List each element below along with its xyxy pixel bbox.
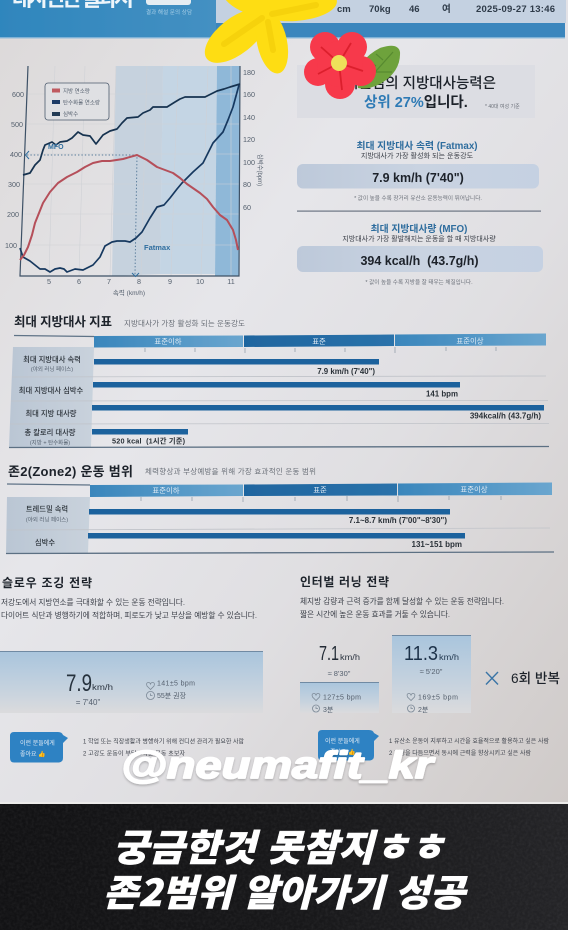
icon: clock: [408, 705, 415, 712]
easy interval: [300, 643, 379, 714]
Fatmax label: Fatmax: [144, 243, 171, 252]
row: treadmill speed: [26, 504, 450, 525]
row: total calories: [24, 428, 188, 446]
easy interval: 7.1: [319, 643, 339, 665]
section subtitle: 지방대사가 가장 활성화 되는 운동강도: [124, 318, 245, 328]
scale header: 표준이하: [152, 486, 180, 495]
easy interval: 127±5 bpm: [323, 694, 361, 702]
heart rate axis ticks: 80: [243, 180, 251, 189]
recommendation list: 1 학업 또는 직장생활과 병행하기 위해 컨디션 관리가 필요한 사람: [83, 738, 244, 746]
hard interval: 169±5 bpm: [418, 694, 458, 702]
row: total calories: 총 칼로리 대사량: [24, 428, 76, 437]
profile row: cm: [337, 4, 351, 15]
row: max fat metabolism: 최대 지방 대사량: [25, 409, 77, 418]
left axis ticks: 100: [5, 241, 17, 250]
strategy description: 저강도에서 지방연소를 극대화할 수 있는 운동 전략입니다.: [1, 597, 185, 607]
slow jogging target panel: km/h: [92, 683, 113, 692]
heart rate axis ticks: 140: [243, 113, 255, 122]
left axis ticks: 600: [12, 90, 24, 99]
section title: 최대 지방대사 지표: [14, 315, 112, 329]
speed axis ticks: 5: [47, 277, 51, 286]
slow jogging target panel: = 7'40": [76, 698, 100, 707]
summary line 2: 상위 27%입니다.: [364, 94, 468, 111]
row: heart rate: 131~151 bpm: [412, 540, 462, 549]
scale header: 표준이상: [460, 485, 488, 494]
left axis ticks: 400: [10, 150, 22, 159]
speed axis ticks: 6: [77, 277, 81, 286]
easy interval: 3분: [323, 706, 334, 714]
panel: MFO: [297, 222, 543, 286]
row: max fat speed: 최대 지방대사 속력: [23, 355, 81, 364]
left axis ticks: [5, 90, 24, 250]
strategy title: 슬로우 조깅 전략: [2, 576, 92, 590]
Fatmax value: 7.9 km/h (7'40"): [372, 171, 464, 185]
chart: fat and carbohydrate burn curves: [5, 66, 264, 297]
row: max fat metabolism: [25, 405, 544, 420]
strategy description: 체지방 감량과 근력 증가를 함께 달성할 수 있는 운동 전략입니다.: [300, 596, 504, 606]
report header: [0, 0, 566, 38]
panel: Fatmax: 최대 지방대사 속력 (Fatmax): [356, 139, 478, 152]
easy interval: ≈ 8'30": [328, 669, 351, 678]
profile row: 여: [442, 3, 451, 15]
sticker: red flower: [304, 32, 376, 99]
row labels column: [6, 497, 90, 553]
strategy description: 짧은 시간에 높은 운동 효과를 거둘 수 있습니다.: [300, 609, 450, 619]
row: total calories: (지방 + 탄수화물): [30, 438, 70, 446]
speech bubble: 좋아요 👍: [20, 750, 46, 758]
speed axis title: 속력 (km/h): [113, 289, 145, 297]
row: max fat speed: (야외 러닝 페이스): [31, 365, 73, 373]
row: max fat heart rate: 141 bpm: [426, 390, 458, 398]
row: max fat heart rate: 최대 지방대사 심박수: [19, 386, 84, 395]
strategy title: 인터벌 러닝 전략: [300, 575, 389, 589]
MFO value pill: [297, 246, 543, 272]
row: treadmill speed: (야외 러닝 페이스): [26, 516, 68, 524]
icon: heart: [407, 693, 415, 700]
hard interval: 2분: [418, 706, 429, 714]
slow jogging target panel: [0, 651, 263, 713]
slow jogging target panel: 55분 권장: [157, 691, 187, 700]
icon: multiply: [486, 672, 498, 684]
Fatmax value pill: [297, 164, 539, 188]
heart rate axis ticks: 60: [243, 203, 251, 212]
slow jogging target panel: 7.9: [66, 670, 92, 697]
MFO and Fatmax guide lines: [27, 155, 137, 275]
section subtitle: 체력향상과 부상예방을 위해 가장 효과적인 운동 범위: [145, 466, 316, 476]
recommendation list: 1 유산소 운동이 지루하고 시간을 효율적으로 활용하고 싶은 사람: [389, 737, 549, 745]
speech bubble: [318, 730, 379, 760]
row: max fat metabolism: 394kcal/h (43.7g/h): [470, 412, 541, 420]
intensity zones: [112, 66, 240, 276]
row: max fat speed: 7.9 km/h (7'40"): [317, 367, 375, 376]
speech bubble: [10, 732, 68, 762]
speed axis ticks: 9: [168, 277, 172, 286]
row: treadmill speed: 트레드밀 속력: [26, 504, 68, 514]
axes: [20, 66, 240, 276]
scale header: 표준: [313, 486, 327, 494]
strategy description: [300, 596, 504, 619]
scale header: 표준: [312, 337, 326, 346]
strategy: slow jogging: [0, 576, 263, 762]
speed axis ticks: 10: [196, 277, 204, 286]
easy interval: km/h: [340, 653, 360, 662]
icon: clock: [313, 705, 320, 712]
summary line 1: 회원님의 지방대사능력은: [345, 75, 496, 92]
Fatmax description: 지방대사가 가장 활성화 되는 운동강도: [361, 151, 474, 160]
row: heart rate: [35, 533, 465, 549]
carbohydrate curve: [20, 85, 239, 272]
scale header: 표준이하: [154, 337, 182, 346]
recommendation list: 2 고강도 운동이 부담스러운 운동 초보자: [83, 750, 185, 758]
icon: heart: [312, 693, 320, 700]
slow jogging target panel: 141±5 bpm: [157, 680, 195, 688]
legend: [45, 83, 109, 120]
recommendation list: [389, 737, 549, 757]
heart rate curve: [23, 84, 240, 175]
heart rate axis ticks: 180: [243, 68, 255, 77]
left axis ticks: 500: [11, 120, 23, 129]
MFO value: 394 kcal/h (43.7g/h): [360, 254, 479, 268]
watermark handle: @neumafit_kr: [121, 745, 436, 787]
row: total calories: 520 kcal (1시간 기준): [112, 436, 186, 446]
panel: MFO: 최대 지방대사량 (MFO): [371, 222, 467, 235]
summary footnote: * 40대 여성 기준: [485, 103, 520, 110]
scale header: [90, 482, 552, 497]
row: max fat speed: [23, 355, 379, 376]
row: treadmill speed: 7.1~8.7 km/h (7'00"~8'30"): [349, 516, 447, 525]
legend: 탄수화물 연소량: [63, 98, 100, 106]
MFO label: MFO: [48, 144, 64, 151]
panel: percentile summary: [297, 65, 535, 118]
MFO note: * 값이 높을 수록 지방을 잘 태우는 체질입니다.: [365, 278, 473, 286]
hard interval: [392, 635, 471, 714]
section: max fat metabolism metrics: [9, 315, 549, 448]
row: max fat heart rate: [19, 382, 460, 398]
icon: heart: [147, 682, 154, 690]
header note: 결과 해설 문의 상담: [146, 8, 192, 16]
section: zone 2 range: [6, 464, 554, 554]
hard interval: 11.3: [404, 643, 438, 665]
strategy: interval running: [300, 575, 560, 760]
caption line 1: 궁금한것 못참지ㅎㅎ: [113, 818, 446, 872]
fat curve: [20, 155, 238, 260]
strategy description: [1, 597, 257, 620]
profile row: 70kg: [369, 4, 391, 15]
section title: 존2(Zone2) 운동 범위: [8, 464, 133, 479]
caption line 2: 존2범위 알아가기 성공: [103, 863, 468, 917]
guide arrowheads: [26, 151, 139, 276]
heart rate axis ticks: 160: [243, 90, 255, 99]
sticker: yellow flower: [196, 0, 338, 76]
left axis ticks: 200: [7, 210, 19, 219]
strategy description: 다이어트 식단과 병행하기에 적합하며, 피로도가 낮고 부상을 예방할 수 있습니다.: [1, 610, 257, 620]
MFO description: 지방대사가 가장 활발해지는 운동을 할 때 지방대사량: [342, 234, 496, 243]
heart rate axis ticks: [243, 68, 255, 212]
heart rate axis ticks: 120: [243, 135, 255, 144]
recommendation list: [83, 738, 244, 758]
hard interval: ≈ 5'20": [420, 667, 443, 676]
profile row: [337, 3, 555, 15]
row: heart rate: 심박수: [35, 538, 55, 547]
icon: clock: [147, 692, 155, 700]
background: black leather desk: [0, 802, 568, 930]
speed axis ticks: 8: [137, 277, 141, 286]
speed axis ticks: [47, 277, 235, 286]
header badge: [146, 0, 191, 5]
repeat count: 6회 반복: [511, 671, 560, 686]
scale header: 표준이상: [456, 336, 484, 346]
panel: Fatmax: [297, 139, 539, 202]
hard interval: km/h: [439, 653, 459, 662]
legend: 지방 연소량: [63, 87, 90, 95]
speech bubble: 이런 분들에게: [325, 737, 360, 745]
recommendation list: 2 체형을 다듬으면서 동시에 근력을 향상시키고 싶은 사람: [389, 749, 531, 757]
profile row: 46: [409, 4, 420, 15]
legend: 심박수: [63, 110, 78, 118]
heart rate axis ticks: 100: [243, 158, 255, 167]
Fatmax note: * 값이 높을 수록 장거리 유산소 운동능력이 뛰어납니다.: [354, 194, 482, 202]
heart rate axis title: 심박수(bpm): [256, 154, 264, 186]
speech bubble: 좋아요 👍: [330, 748, 356, 756]
scale header: [94, 334, 546, 348]
profile row: 2025-09-27 13:46: [476, 4, 555, 15]
speech bubble: 이런 분들에게: [20, 739, 55, 747]
row labels column: [9, 347, 94, 447]
speed axis ticks: 7: [107, 277, 111, 286]
sticker: leaf: [357, 46, 400, 88]
left axis ticks: 300: [8, 180, 20, 189]
speed axis ticks: 11: [227, 277, 235, 286]
